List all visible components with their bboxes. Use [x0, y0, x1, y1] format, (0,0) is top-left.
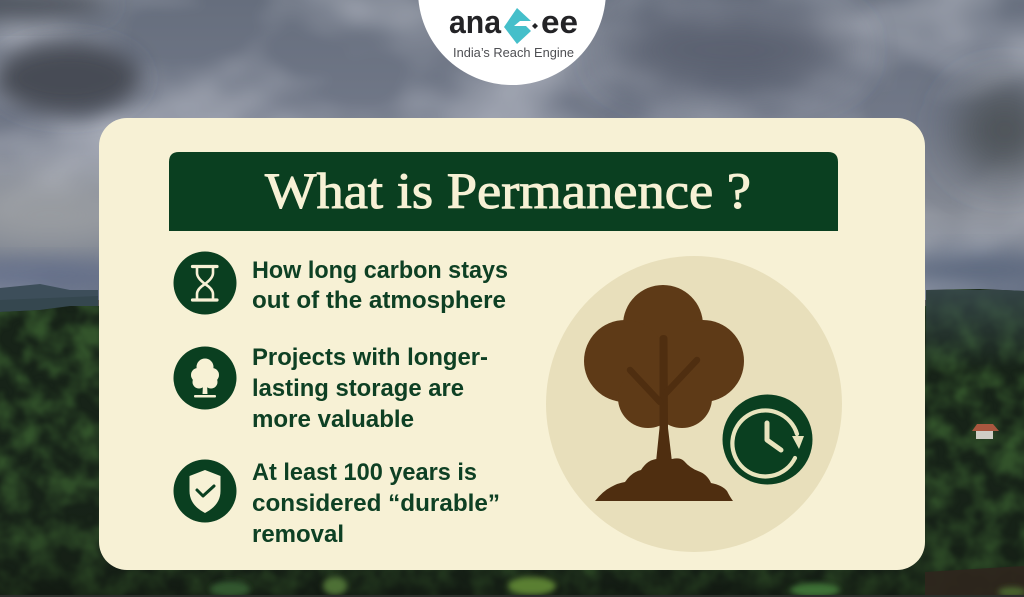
- logo wordmark: ee: [541, 4, 578, 40]
- illustration: tree with clock: [546, 256, 842, 552]
- background: forest: [0, 270, 1024, 597]
- text: projects: more valuable: [252, 406, 414, 433]
- tree trunk and branches: [630, 335, 697, 462]
- title banner: [169, 152, 838, 231]
- logo badge: [418, 0, 606, 85]
- icon: tree: [174, 346, 236, 410]
- tree crown: [584, 285, 744, 428]
- item: shield: [174, 459, 507, 548]
- logo wordmark: [449, 4, 578, 44]
- text: projects: lasting storage are: [252, 375, 464, 402]
- soil mound: [595, 458, 733, 501]
- text: at least: considered “durable”: [252, 490, 500, 517]
- logo tagline: India’s Reach Engine: [453, 45, 574, 60]
- logo wordmark: ana: [449, 4, 501, 40]
- text: how long: out of the atmosphere: [252, 287, 506, 314]
- text: at least: removal: [252, 521, 344, 548]
- text: at least: At least 100 years is: [252, 459, 477, 486]
- clock badge: [722, 394, 812, 484]
- title: What is Permanence ?: [265, 164, 751, 220]
- text: how long: How long carbon stays: [252, 257, 508, 284]
- item: hourglass: [174, 252, 515, 314]
- text: projects: Projects with longer-: [252, 344, 488, 371]
- background: cloudy sky: [0, 0, 1024, 300]
- main panel: [99, 118, 925, 570]
- icon: shield: [174, 460, 236, 522]
- icon: hourglass: [174, 252, 236, 314]
- item: tree: [174, 344, 495, 433]
